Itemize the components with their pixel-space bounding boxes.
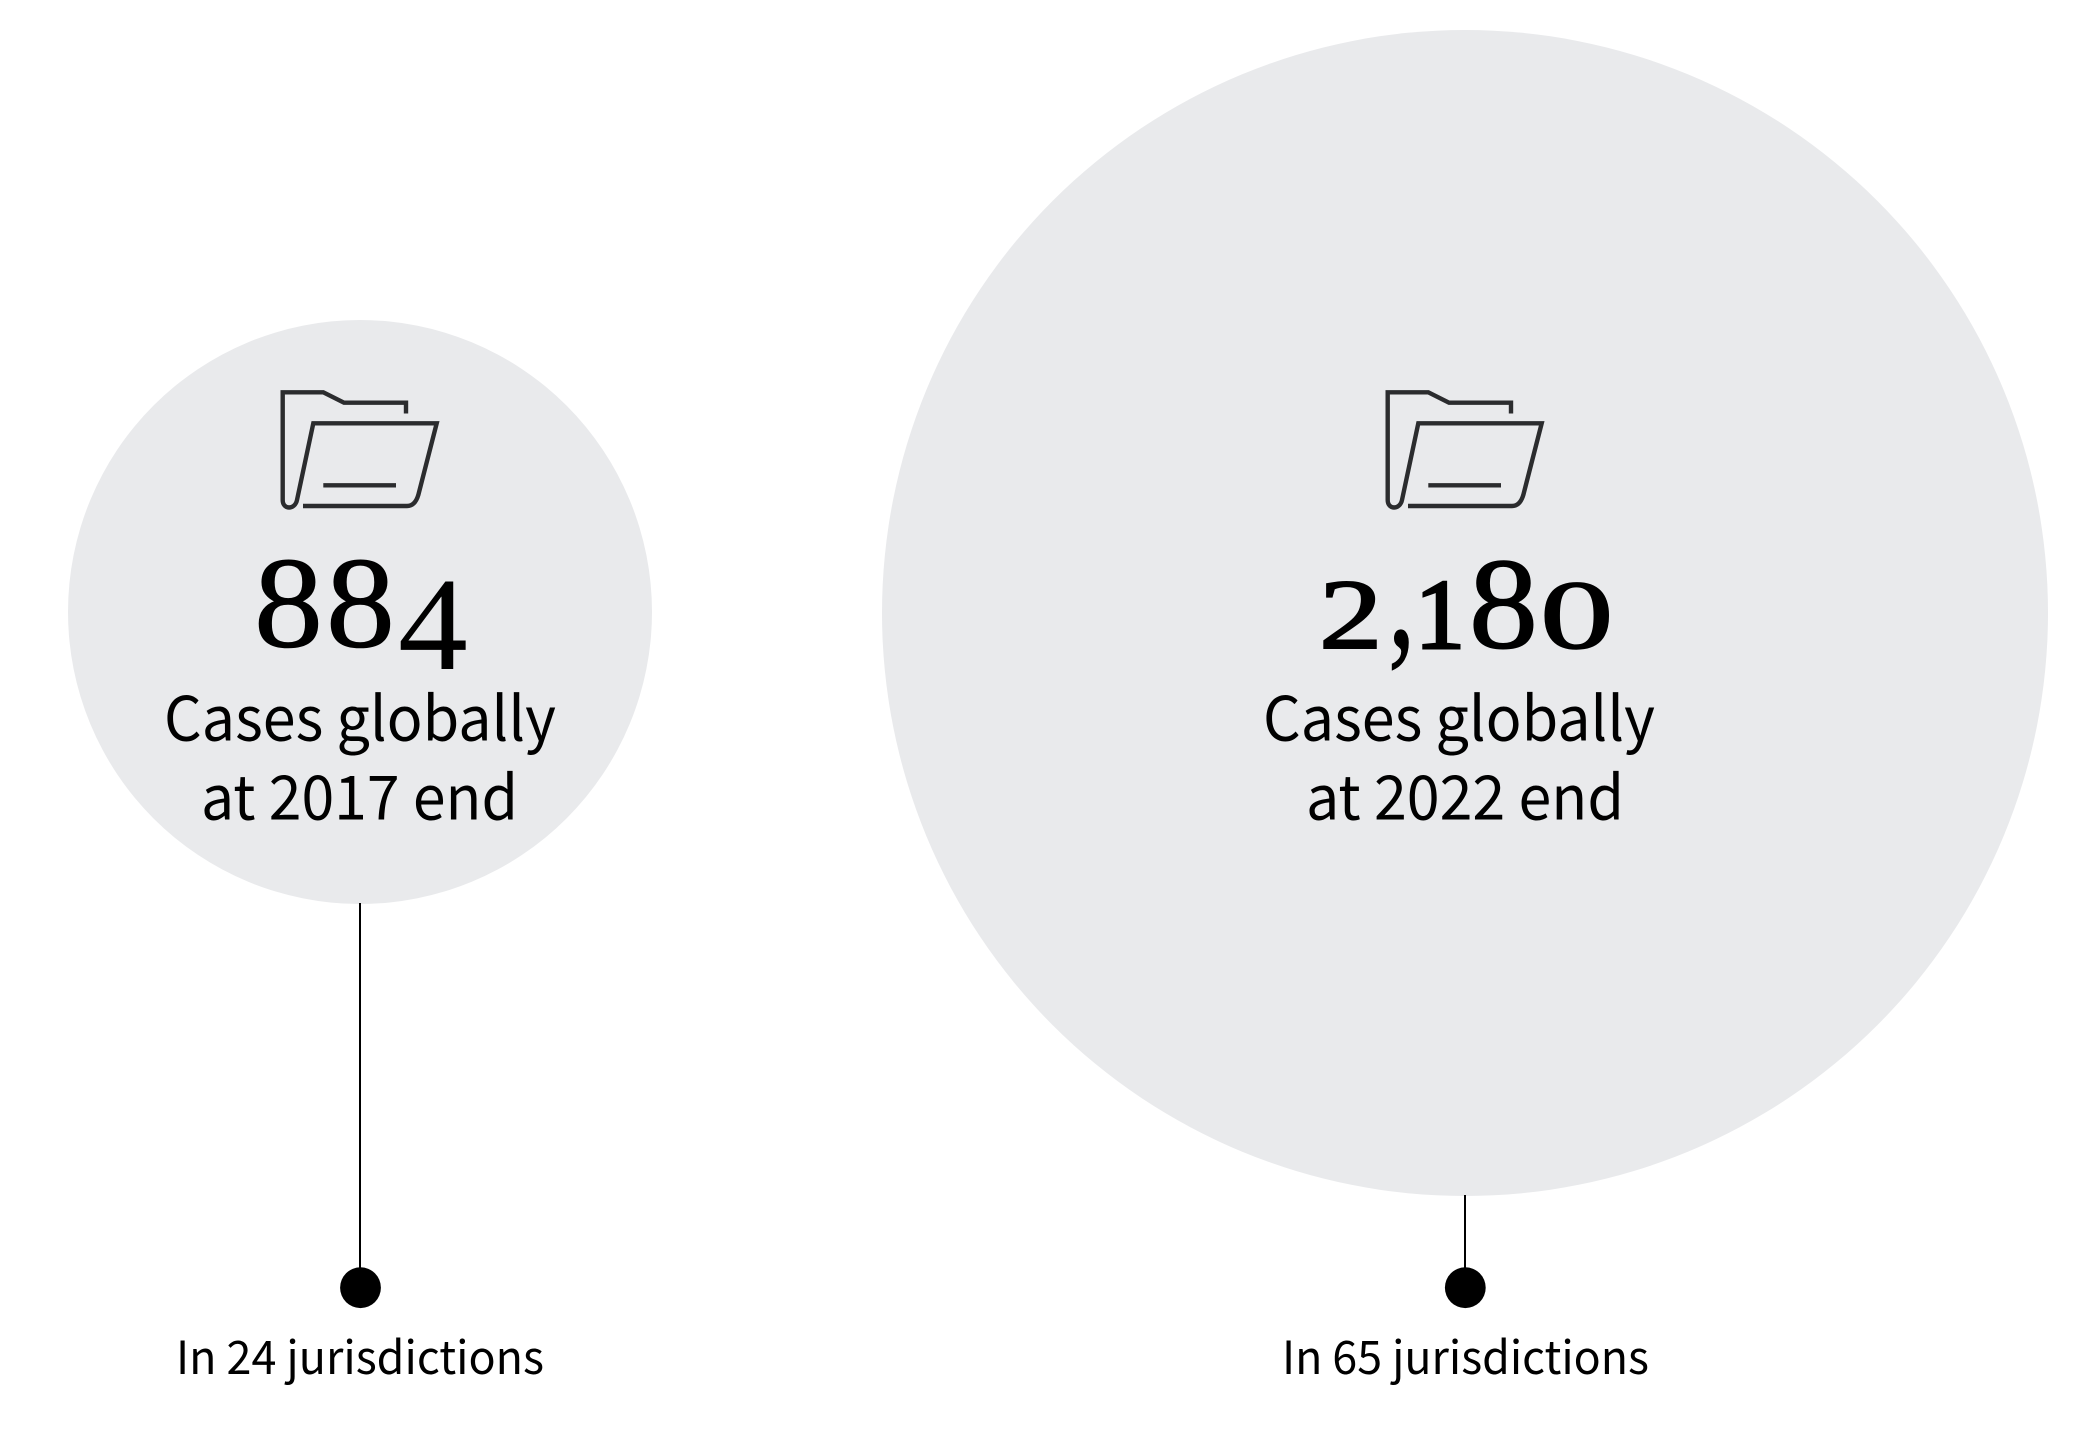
- label: cases globally at 2017 end: at 2017 end: [201, 748, 518, 838]
- connector: 2022 line and dot: [1445, 1195, 1486, 1308]
- label: cases globally at 2022 end: Cases globally: [1263, 670, 1655, 758]
- number: 884: 8: [254, 531, 323, 675]
- connector: 2017 line and dot: [340, 903, 381, 1308]
- number: 2,180: 1: [1415, 559, 1465, 670]
- label: cases globally at 2022 end: at 2022 end: [1306, 748, 1624, 838]
- number: 2,180: 0: [1540, 562, 1613, 670]
- number: 2,180: ,: [1388, 508, 1415, 681]
- label: cases globally at 2022 end: [1263, 670, 1655, 838]
- panel: 2017 cases: [68, 320, 652, 1388]
- number: 2,180: [1319, 508, 1613, 681]
- number: 884: 4: [398, 551, 468, 698]
- number: 2,180: 8: [1469, 532, 1538, 676]
- panel: 2022 cases: [882, 30, 2048, 1388]
- number: 2,180: 2: [1319, 559, 1383, 670]
- number: 884: 8: [326, 531, 395, 675]
- label: in 24 jurisdictions: In 24 jurisdictions: [176, 1322, 544, 1388]
- number: 884: [254, 531, 468, 698]
- label: cases globally at 2017 end: [164, 670, 556, 838]
- label: cases globally at 2017 end: Cases globally: [164, 670, 556, 758]
- icon: folder 2017: [283, 392, 437, 508]
- circle: 2017: [68, 320, 652, 904]
- icon: folder 2022: [1388, 392, 1542, 508]
- circle: 2022: [882, 30, 2048, 1196]
- label: in 65 jurisdictions: In 65 jurisdictions: [1282, 1322, 1649, 1388]
